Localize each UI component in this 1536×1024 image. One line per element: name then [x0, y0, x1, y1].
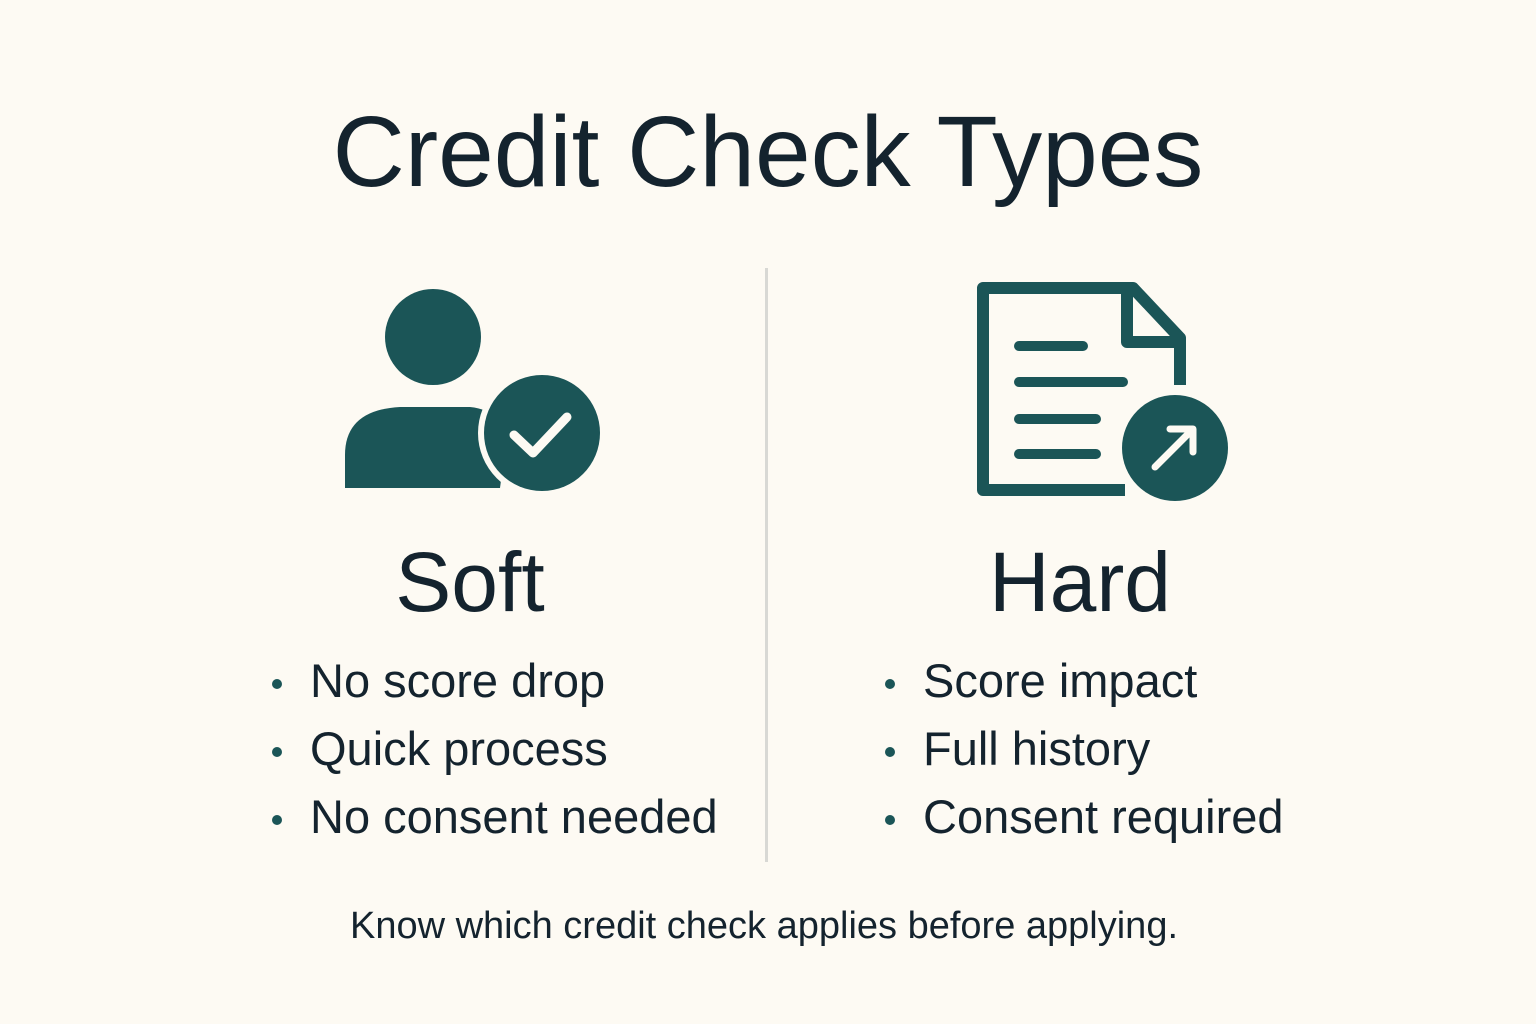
title: Credit Check Types [333, 96, 1203, 208]
list: hard: Score impact [923, 654, 1197, 707]
list: hard: Full history [923, 722, 1150, 775]
icon: person with check [345, 289, 600, 491]
list: soft: No consent needed [310, 790, 718, 843]
list: soft: Quick process [310, 722, 608, 775]
heading: Hard: Hard [989, 535, 1171, 629]
icon: document with arrow [977, 282, 1228, 501]
heading: Soft: Soft [395, 535, 545, 629]
footer note: Know which credit check applies before applying. [350, 905, 1178, 947]
list: hard [885, 654, 1284, 843]
divider [765, 268, 768, 862]
list: hard: Consent required [923, 790, 1284, 843]
list: soft [272, 654, 718, 843]
list: soft: No score drop [310, 654, 605, 707]
